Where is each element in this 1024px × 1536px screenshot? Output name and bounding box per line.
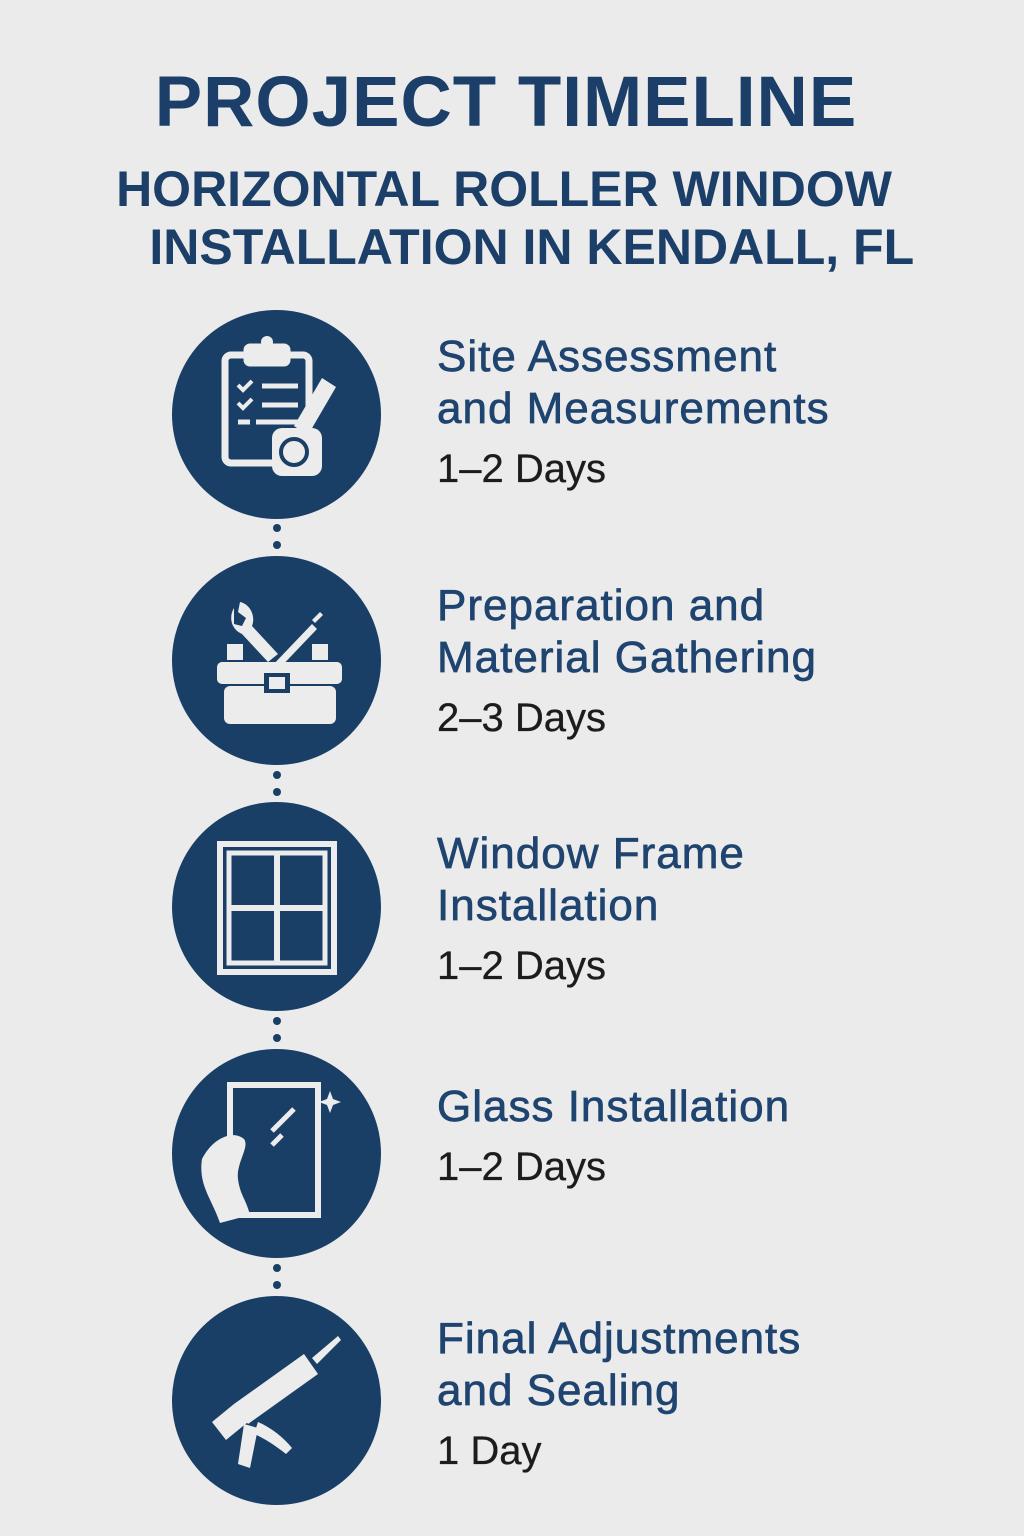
step 1 text: and Measurements [437, 384, 830, 433]
step 5 text [437, 1314, 801, 1473]
connector [273, 771, 281, 779]
step 4 text: 1–2 Days [437, 1145, 606, 1189]
step 1 text: Site Assessment [437, 332, 777, 381]
title: PROJECT TIMELINE [155, 63, 857, 142]
step 5 text: and Sealing [437, 1366, 680, 1415]
connector [273, 1017, 281, 1025]
subtitle [116, 161, 914, 275]
icon: glass pane in hand [172, 1049, 381, 1258]
icon: toolbox [172, 556, 381, 765]
step 4 text: Glass Installation [437, 1082, 790, 1131]
subtitle: INSTALLATION IN KENDALL, FL [149, 219, 914, 275]
step 3 text: Installation [437, 881, 659, 930]
step 1 text [437, 332, 830, 491]
step 2 text: Material Gathering [437, 633, 817, 682]
step 2 text: Preparation and [437, 581, 765, 630]
step 5 text: 1 Day [437, 1429, 542, 1473]
step 2 text: 2–3 Days [437, 696, 606, 740]
step 1 text: 1–2 Days [437, 447, 606, 491]
icon: clipboard and tape measure [172, 310, 381, 519]
subtitle: HORIZONTAL ROLLER WINDOW [116, 161, 892, 217]
icon: caulk gun [172, 1296, 381, 1505]
step 3 text [436, 829, 745, 988]
step 3 text: Window Frame [437, 829, 745, 878]
step 4 text [437, 1082, 790, 1189]
connector [273, 524, 281, 532]
step 2 text [437, 581, 817, 740]
connector [273, 1264, 281, 1272]
step 5 text: Final Adjustments [437, 1314, 801, 1363]
step 3 text: 1–2 Days [437, 944, 606, 988]
icon: window frame [172, 802, 381, 1011]
